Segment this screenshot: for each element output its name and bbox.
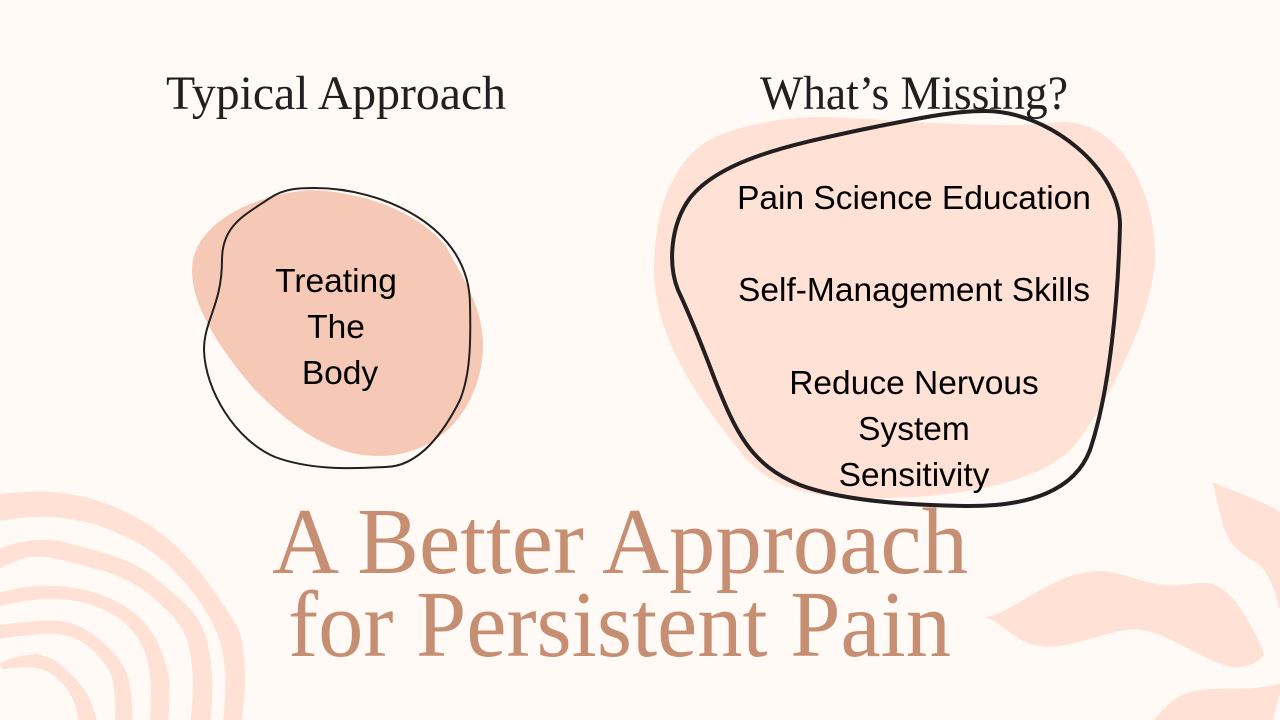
text: Treating The Body: Treating bbox=[275, 263, 397, 300]
text: Treating The Body: The bbox=[307, 309, 365, 346]
blob fill: typical approach bbox=[192, 190, 483, 456]
panel: typical approach blob bbox=[192, 188, 483, 468]
heading: What's Missing?: What’s Missing? bbox=[760, 67, 1068, 120]
text: Reduce Nervous System Sensitivity: System bbox=[858, 411, 970, 448]
blob outline: what's missing bbox=[672, 111, 1120, 506]
decoration: concentric arcs bottom left bbox=[0, 492, 245, 720]
blob fill: what's missing bbox=[654, 117, 1155, 498]
text: Reduce Nervous System Sensitivity: Sensitivity bbox=[839, 457, 990, 494]
title: A Better Approach for Persistent Pain: A Better Approach bbox=[272, 490, 968, 594]
text: Pain Science Education: Pain Science Education bbox=[737, 180, 1091, 217]
text: Treating The Body bbox=[275, 263, 397, 392]
text: Reduce Nervous System Sensitivity: Reduce Nervous bbox=[789, 365, 1039, 402]
text: Reduce Nervous System Sensitivity bbox=[789, 365, 1039, 494]
title: A Better Approach for Persistent Pain bbox=[272, 490, 968, 677]
panel: what's missing blob bbox=[654, 111, 1155, 506]
decoration: leaves bottom right bbox=[985, 482, 1280, 720]
title: A Better Approach for Persistent Pain: for Persistent Pain bbox=[288, 573, 951, 677]
blob outline: typical approach bbox=[204, 188, 470, 468]
text: Self-Management Skills: Self-Management Skills bbox=[738, 272, 1090, 309]
text: Treating The Body: Body bbox=[302, 355, 378, 392]
heading: Typical Approach: Typical Approach bbox=[166, 67, 506, 120]
